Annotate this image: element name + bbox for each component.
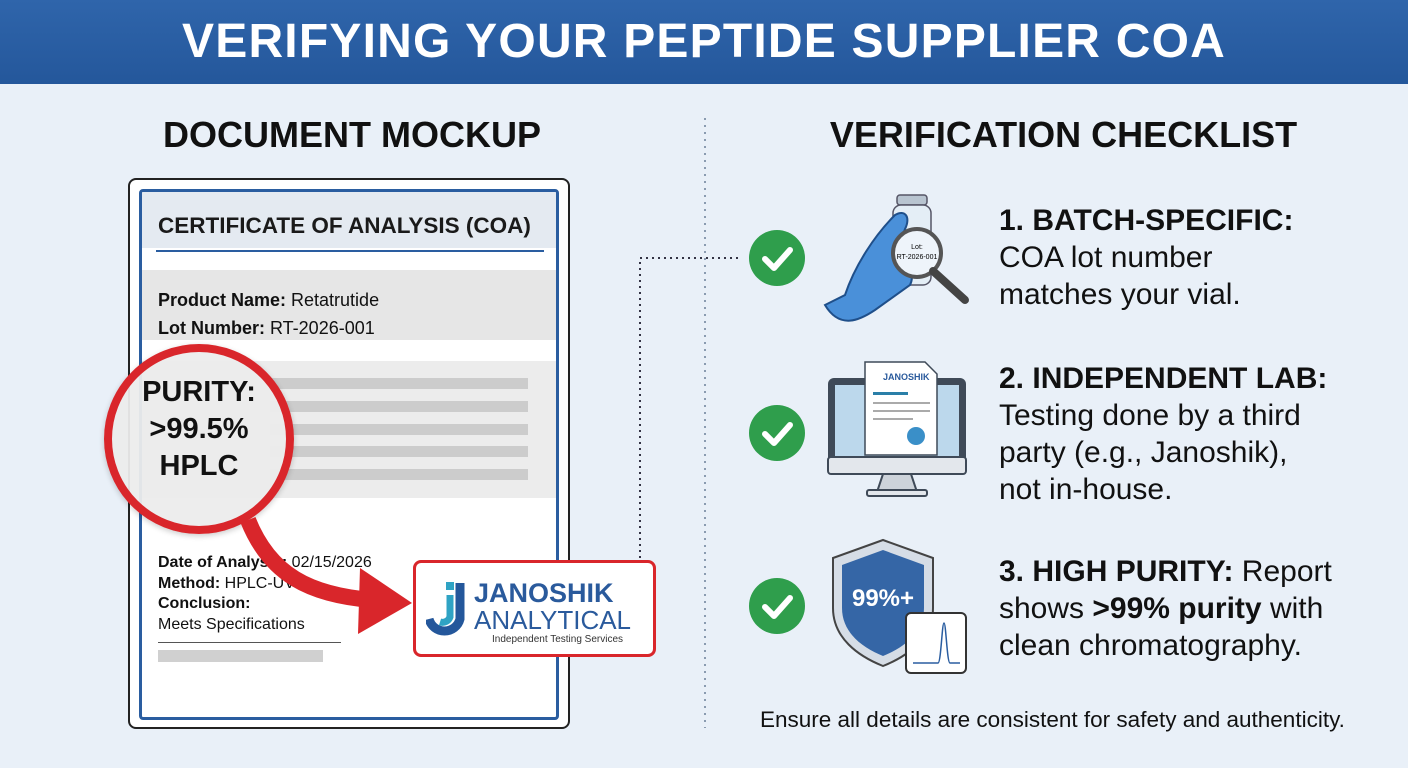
callout: purity magnifier circle: [104, 344, 294, 534]
footer note: Ensure all details are consistent for safety and authenticity.: [760, 707, 1345, 732]
icon: gloved hand with vial and magnifier: [824, 194, 969, 322]
heading: document mockup: DOCUMENT MOCKUP: [163, 114, 541, 155]
placeholder data bars: [142, 361, 556, 498]
callout: Janoshik Analytical logo: [413, 560, 656, 657]
analysis details: [158, 554, 372, 632]
analysis details: Meets Specifications: [158, 616, 305, 632]
callout: Janoshik Analytical logo: ANALYTICAL: [474, 605, 631, 635]
text: item 2: [999, 362, 1327, 506]
checkmark 1: [749, 230, 805, 286]
header banner: VERIFYING YOUR PEPTIDE SUPPLIER COA: [182, 15, 1226, 68]
callout: purity magnifier circle: >99.5%: [149, 413, 249, 445]
text: item 1: 1. BATCH-SPECIFIC:: [999, 204, 1293, 237]
text: item 3: clean chromatography.: [999, 629, 1302, 662]
text: item 3: 3. HIGH PURITY: Report: [999, 555, 1332, 588]
product info: [142, 270, 556, 340]
text: item 3: [999, 555, 1332, 662]
heading: verification checklist: VERIFICATION CHECKLIST: [830, 114, 1297, 155]
callout: purity magnifier circle: HPLC: [160, 450, 238, 482]
analysis details: Method: HPLC-UV: [158, 574, 295, 592]
checkmark 3: [749, 578, 805, 634]
text: item 1: matches your vial.: [999, 278, 1241, 311]
icon: shield 99%+ with chromatogram: [832, 538, 967, 674]
product info: Lot Number: RT-2026-001: [158, 318, 375, 338]
header banner: [0, 0, 1408, 84]
text: item 2: 2. INDEPENDENT LAB:: [999, 362, 1327, 395]
icon: gloved hand with vial and magnifier: RT-2026-001: [897, 254, 937, 261]
icon: gloved hand with vial and magnifier: Lot:: [911, 244, 923, 251]
text: item 2: party (e.g., Janoshik),: [999, 436, 1287, 469]
analysis details: Date of Analysis: 02/15/2026: [158, 554, 372, 571]
text: item 1: [999, 204, 1293, 311]
icon: monitor with Janoshik report: JANOSHIK: [883, 372, 930, 382]
text: item 1: COA lot number: [999, 241, 1212, 274]
icon: shield 99%+ with chromatogram: 99%+: [852, 585, 914, 612]
callout: Janoshik Analytical logo: JANOSHIK: [474, 578, 614, 608]
text: item 2: Testing done by a third: [999, 399, 1301, 432]
document title: CERTIFICATE OF ANALYSIS (COA): [158, 213, 531, 238]
text: item 2: not in-house.: [999, 473, 1172, 506]
text: item 3: shows >99% purity with: [999, 592, 1323, 625]
callout: purity magnifier circle: PURITY:: [142, 376, 256, 408]
checkmark 2: [749, 405, 805, 461]
panel: COA document: [128, 178, 570, 729]
callout: Janoshik Analytical logo: Independent Testing Services: [492, 634, 623, 645]
icon: monitor with Janoshik report: [827, 361, 967, 497]
analysis details: Conclusion:: [158, 595, 250, 612]
product info: Product Name: Retatrutide: [158, 290, 379, 310]
